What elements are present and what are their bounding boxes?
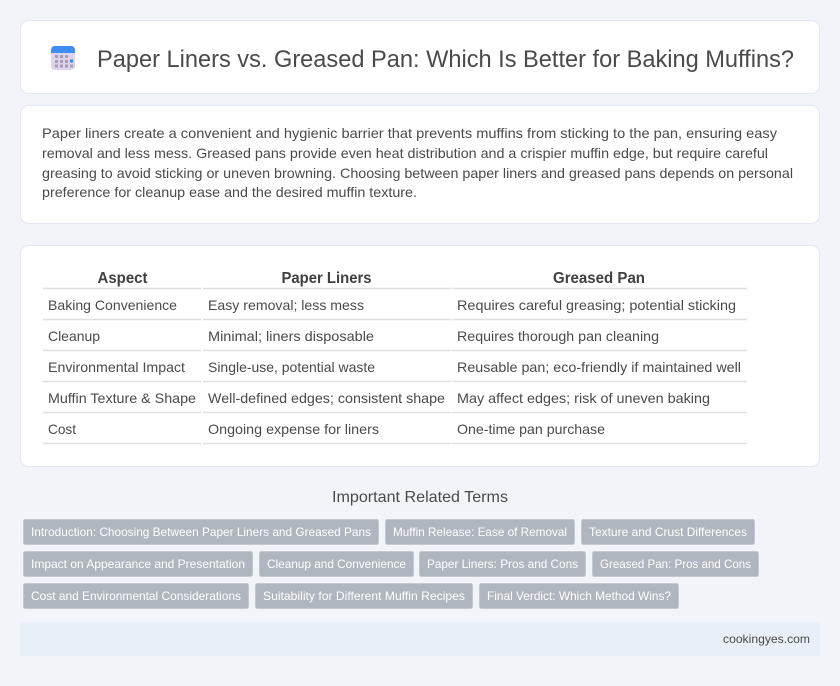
tag [24, 552, 252, 576]
tag: Final Verdict: Which Method Wins? [487, 589, 671, 603]
table row: baking convenience: Easy removal; less mess [208, 297, 364, 313]
icon: calendar [51, 46, 75, 70]
tag [582, 520, 754, 544]
tag [480, 584, 678, 608]
table header: Greased Pan [553, 270, 645, 287]
tag list: related terms [24, 520, 758, 608]
tag: Impact on Appearance and Presentation [31, 557, 245, 571]
tag [256, 584, 472, 608]
tag: Paper Liners: Pros and Cons [427, 557, 578, 571]
table row: baking convenience: Requires careful greasing; potential sticking [457, 297, 736, 313]
table row: cleanup: Cleanup [48, 328, 100, 344]
tag: Cleanup and Convenience [267, 557, 406, 571]
table row: environmental impact: Single-use, potential waste [208, 359, 375, 375]
table rules [43, 288, 747, 444]
table row: environmental impact: Reusable pan; eco-friendly if maintained well [457, 359, 741, 375]
tag [420, 552, 586, 576]
table row: environmental impact [48, 359, 741, 375]
title: Paper Liners vs. Greased Pan: Which Is Better for Baking Muffins? [97, 46, 794, 73]
table row: cost: Ongoing expense for liners [208, 421, 379, 437]
text block: introduction: Paper liners create a convenient and hygienic barrier that prevents muffins from sticking to the pan, ensuring easy [42, 125, 777, 141]
footer [20, 622, 820, 656]
table header [98, 270, 645, 287]
table row: muffin texture and shape: Well-defined edges; consistent shape [208, 390, 445, 406]
tag [260, 552, 414, 576]
heading: important related terms: Important Related Terms [332, 489, 508, 506]
table header: Aspect [98, 270, 148, 287]
table row: cleanup: Requires thorough pan cleaning [457, 328, 659, 344]
table row: muffin texture and shape: Muffin Texture & Shape [48, 390, 196, 406]
tag [24, 520, 378, 544]
table row: cleanup [48, 328, 659, 344]
table header: Paper Liners [282, 270, 372, 287]
panel: introduction [20, 106, 820, 224]
table row: environmental impact: Environmental Impact [48, 359, 185, 375]
text block: introduction: removal and less mess. Greased pans provide even heat distribution and a crispier muffin edge, but require careful [42, 145, 768, 161]
text block: introduction [42, 125, 793, 200]
table row: cost: Cost [48, 421, 76, 437]
table row: muffin texture and shape [48, 390, 710, 406]
table row: cost [48, 421, 605, 437]
tag: Greased Pan: Pros and Cons [600, 557, 751, 571]
tag: Introduction: Choosing Between Paper Liners and Greased Pans [31, 525, 371, 539]
table row: cost: One-time pan purchase [457, 421, 605, 437]
panel: header [20, 20, 820, 94]
tag [24, 584, 248, 608]
table row: cleanup: Minimal; liners disposable [208, 328, 374, 344]
text block: introduction: preference for cleanup ease and the desired muffin texture. [42, 184, 417, 200]
tag [592, 552, 758, 576]
tag: Muffin Release: Ease of Removal [393, 525, 567, 539]
table row: baking convenience: Baking Convenience [48, 297, 177, 313]
table row: muffin texture and shape: May affect edges; risk of uneven baking [457, 390, 710, 406]
tag: Suitability for Different Muffin Recipes [263, 589, 465, 603]
footer source: cookingyes.com [723, 632, 810, 646]
table row: baking convenience [48, 297, 736, 313]
text block: introduction: greasing to avoid sticking or uneven browning. Choosing between paper liners and greased pans depends on personal [42, 165, 793, 181]
tag: Texture and Crust Differences [589, 525, 747, 539]
tag [386, 520, 574, 544]
panel: comparison table [20, 246, 820, 466]
tag: Cost and Environmental Considerations [31, 589, 241, 603]
